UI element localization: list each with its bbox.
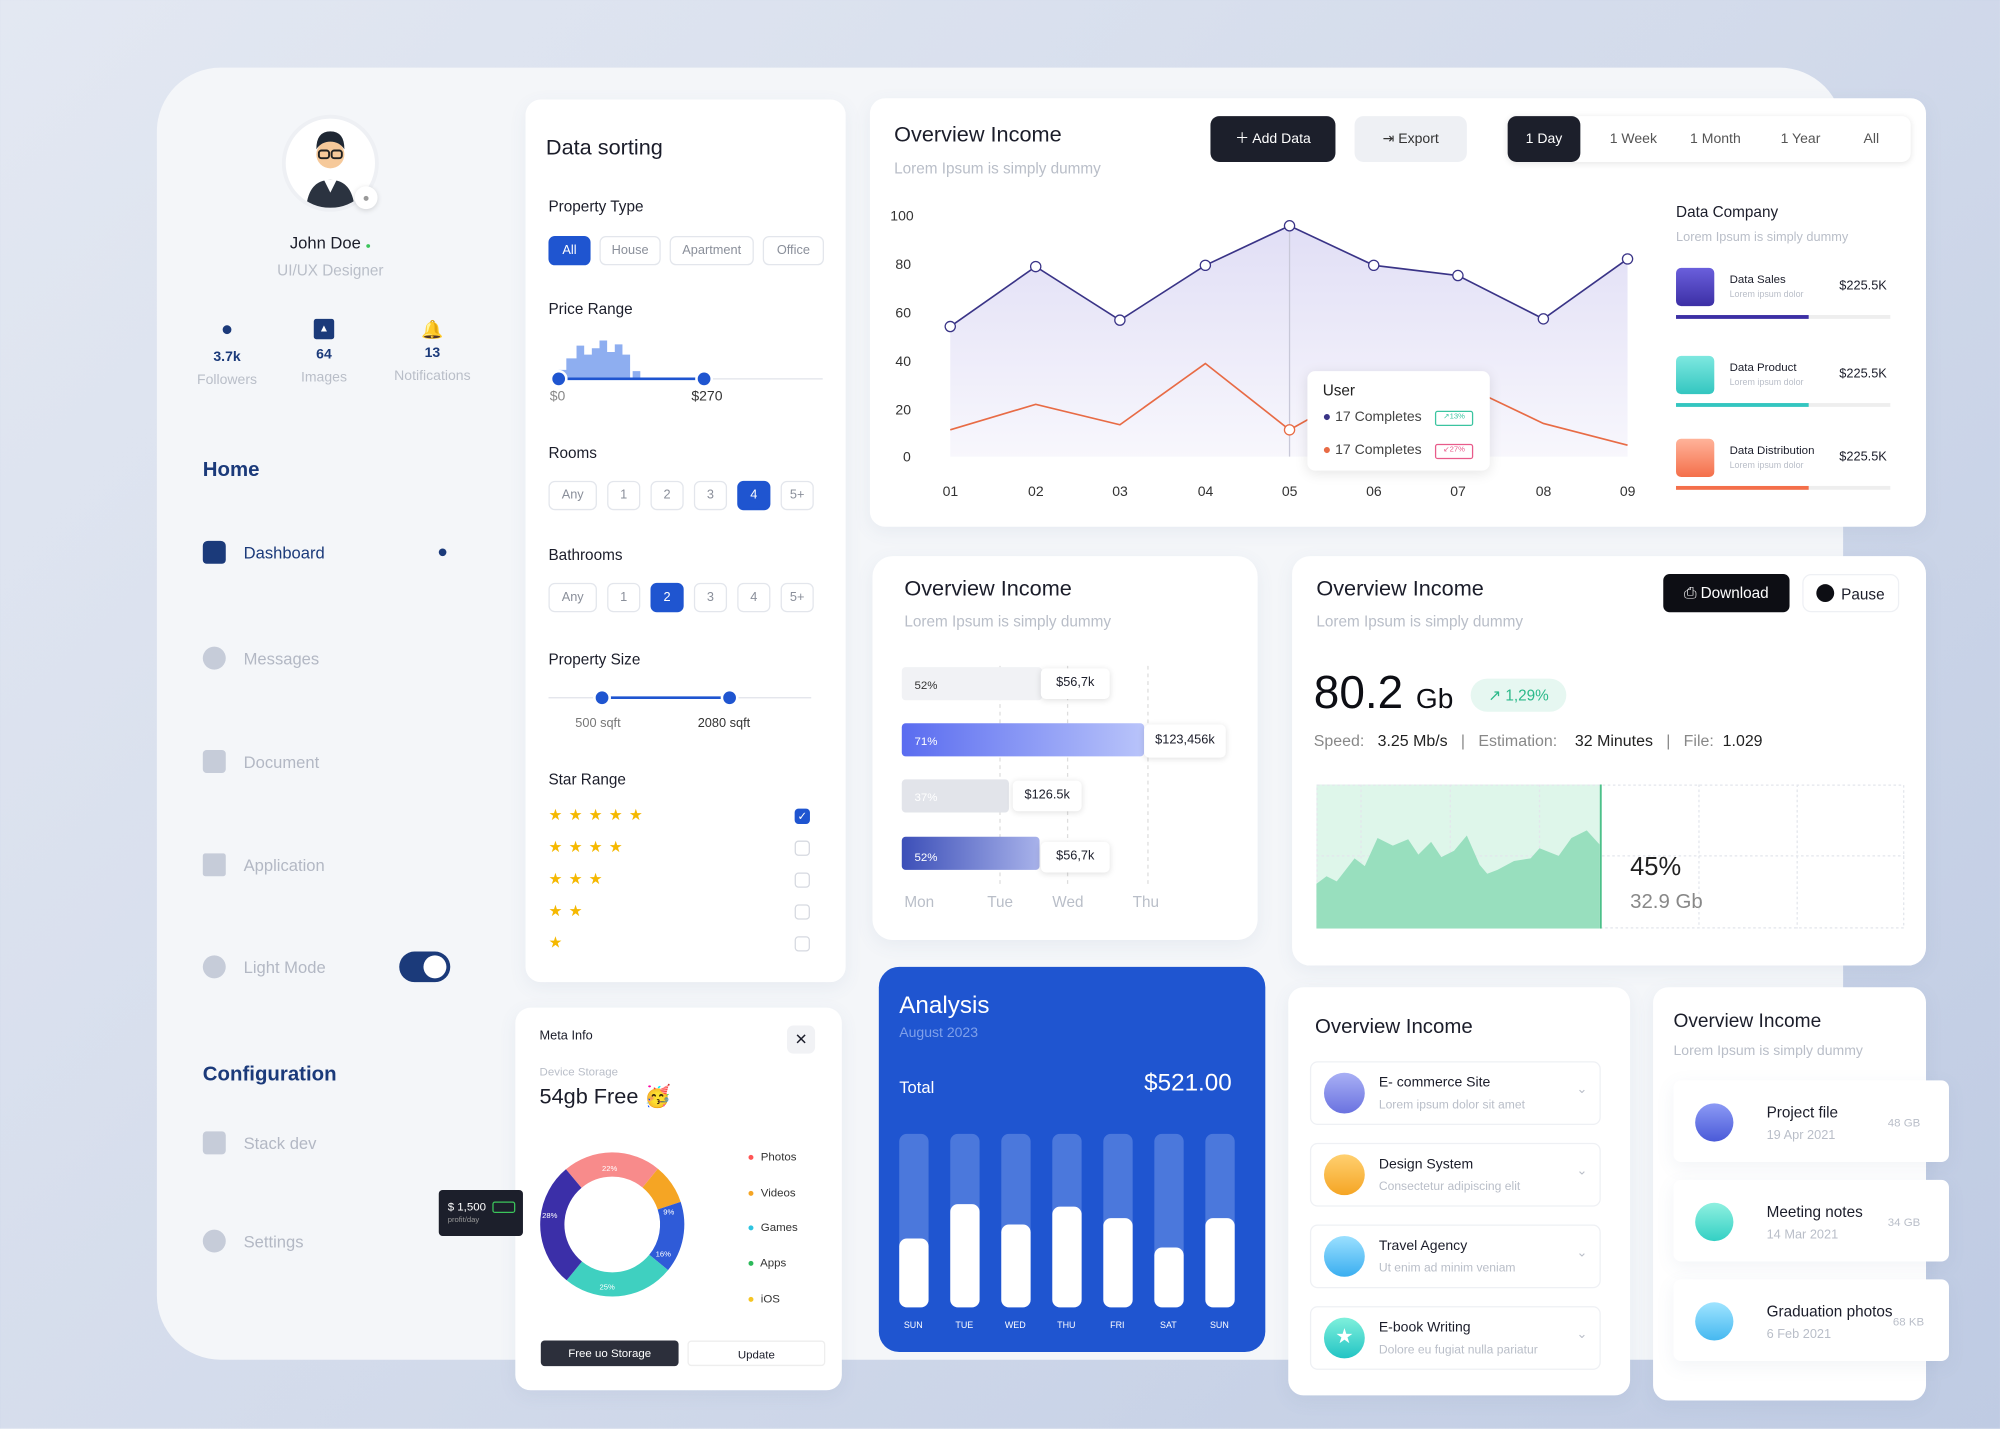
stats: Followers (197, 372, 257, 388)
panel: meta info (515, 1008, 842, 1390)
panel: overview income bars: 37% (915, 792, 938, 804)
callout: profit: $ 1,500 (448, 1200, 486, 1213)
panel: overview list: Dolore eu fugiat nulla pariatur (1379, 1343, 1538, 1357)
panel: overview income line chart (870, 98, 1926, 527)
tooltip: ● 17 Completes (1323, 409, 1422, 425)
panel: overview income bars: $126.5k (1024, 788, 1070, 802)
panel: data sorting: Any (562, 591, 584, 605)
donut: 9% (663, 1207, 675, 1216)
main panel (157, 68, 1843, 1360)
panel: data sorting: ★ (548, 934, 569, 952)
tooltip: ● 17 Completes (1323, 443, 1422, 458)
sidebar (197, 119, 471, 1252)
panel: overview list: Lorem ipsum dolor sit amet (1379, 1098, 1525, 1112)
stats: 13 (425, 346, 440, 361)
line chart: 05 (1282, 483, 1298, 499)
panel: data sorting: ✓ (797, 810, 807, 823)
panel: overview list: Travel Agency (1379, 1239, 1467, 1254)
panel: overview list: ★ (1335, 1327, 1354, 1348)
panel: files: Overview Income (1673, 1010, 1821, 1032)
panel: analysis: SUN (1210, 1320, 1229, 1330)
sidebar: Document (244, 752, 319, 771)
panel: overview list: ⌄ (1577, 1246, 1587, 1260)
sidebar: Settings (244, 1232, 304, 1251)
stats (197, 318, 471, 388)
panel: data sorting: House (612, 244, 649, 258)
panel: overview income line chart: Lorem Ipsum is simply dummy (1676, 231, 1848, 245)
panel: analysis: THU (1057, 1320, 1075, 1330)
panel: data sorting: 2 (664, 489, 671, 503)
panel: analysis: WED (1005, 1320, 1026, 1330)
panel: overview income bars: 52% (915, 680, 938, 692)
stats: Notifications (394, 369, 471, 384)
sidebar: ● (363, 191, 370, 204)
panel: analysis: SUN (904, 1320, 923, 1330)
panel: analysis: Analysis (899, 992, 989, 1019)
panel: data sorting: 2 (664, 591, 671, 605)
panel: analysis: TUE (955, 1320, 973, 1330)
panel: analysis: FRI (1110, 1320, 1125, 1330)
panel: overview income bars: $56,7k (1056, 676, 1094, 690)
panel: overview list: Ut enim ad minim veniam (1379, 1261, 1516, 1276)
panel: download: 32.9 Gb (1630, 892, 1703, 913)
legend (747, 1151, 798, 1305)
line chart: 80 (895, 256, 911, 272)
panel: data sorting: 1 (620, 591, 627, 605)
callout: profit: profit/day (448, 1217, 479, 1224)
line chart: 100 (890, 208, 914, 224)
panel: overview list: Design System (1379, 1157, 1473, 1172)
sidebar: Stack dev (244, 1133, 316, 1152)
panel: overview list: ⌄ (1577, 1328, 1587, 1342)
stats: 3.7k (213, 349, 241, 365)
panel: meta info: Update (738, 1348, 775, 1361)
panel: overview income bars: Tue (987, 893, 1013, 911)
donut: 22% (602, 1164, 618, 1173)
legend: ● iOS (747, 1292, 780, 1305)
tooltip: ↗13% (1443, 413, 1465, 421)
toggle (399, 952, 450, 982)
panel: data sorting: 5+ (790, 591, 804, 605)
panel: download: Pause (1841, 585, 1885, 603)
panel: overview income line chart: Lorem ipsum dolor (1730, 379, 1804, 388)
line chart: 04 (1198, 483, 1213, 499)
tooltip: User (1323, 381, 1355, 399)
panel: data sorting: ★★★ (548, 870, 609, 888)
file: graduation photos (1673, 1279, 1949, 1361)
panel: overview income line chart: Lorem Ipsum is simply dummy (894, 159, 1101, 177)
panel: data sorting: 4 (750, 489, 757, 503)
panel: overview income line chart: Overview Income (894, 122, 1062, 147)
file: project file: Project file (1767, 1103, 1838, 1121)
panel: data sorting: Apartment (682, 244, 741, 258)
panel: data sorting: 3 (707, 489, 714, 503)
line chart: 03 (1112, 483, 1128, 499)
name: John Doe ● (290, 233, 371, 253)
legend: ● Videos (747, 1186, 796, 1199)
legend: ● Apps (747, 1257, 786, 1269)
panel: overview income line chart: 1 Day (1526, 131, 1562, 147)
panel: data sorting: 2080 sqft (698, 717, 750, 731)
line chart: 07 (1450, 483, 1466, 499)
panel: meta info: Meta Info (540, 1029, 593, 1043)
panel: data sorting: Price Range (548, 300, 633, 318)
file: meeting notes: Meeting notes (1767, 1203, 1863, 1221)
panel: download: Speed: 3.25 Mb/s | Estimation: 32 Minutes | File: 1.029 (1314, 732, 1763, 750)
panel: meta info: Free uo Storage (568, 1347, 651, 1360)
panel: overview income bars: 71% (915, 736, 938, 748)
line chart: 08 (1536, 483, 1552, 499)
line chart: 0 (903, 449, 911, 465)
donut (540, 1152, 684, 1296)
legend: ● Photos (747, 1151, 797, 1163)
panel: overview income line chart: Data Distribution (1730, 444, 1814, 457)
panel: overview list (1288, 987, 1630, 1395)
panel: data sorting: Star Range (548, 770, 626, 788)
panel: download (1292, 556, 1926, 966)
file: graduation photos: Graduation photos (1767, 1302, 1893, 1320)
panel: overview list: ⌄ (1577, 1165, 1587, 1179)
panel: download: Overview Income (1316, 577, 1484, 601)
panel: download: ⎙ Download (1684, 584, 1769, 602)
panel: overview list: E-book Writing (1379, 1320, 1471, 1335)
panel: overview income line chart: Lorem ipsum dolor (1730, 462, 1804, 471)
line chart: 20 (895, 402, 911, 418)
sidebar: Dashboard (244, 543, 325, 562)
panel: files: Lorem Ipsum is simply dummy (1673, 1043, 1863, 1059)
panel: overview income bars (872, 556, 1258, 940)
panel: overview income line chart: $225.5K (1839, 450, 1887, 464)
file: project file: 48 GB (1888, 1116, 1920, 1129)
sidebar: Application (244, 855, 325, 874)
panel: overview list: E- commerce Site (1379, 1075, 1490, 1091)
panel: overview list: ⌄ (1577, 1083, 1587, 1097)
panel: download: 45% (1630, 853, 1681, 881)
panel: meta info: ✕ (795, 1031, 807, 1048)
panel: overview income bars: $123,456k (1155, 733, 1215, 747)
panel: data sorting: Bathrooms (548, 546, 622, 564)
line chart: 02 (1028, 483, 1044, 499)
panel: data sorting: ★★ (548, 902, 589, 920)
panel: overview list: Overview Income (1315, 1017, 1473, 1038)
panel: meta info: Device Storage (540, 1065, 618, 1078)
histogram (552, 340, 823, 386)
line chart (890, 208, 1636, 499)
file: graduation photos: 6 Feb 2021 (1767, 1328, 1831, 1342)
panel: data sorting: ★★★★★ (548, 806, 649, 824)
panel: data sorting: 4 (750, 591, 757, 605)
sidebar: Messages (244, 649, 319, 668)
tooltip: ↙27% (1443, 446, 1465, 454)
donut: 25% (599, 1283, 615, 1292)
sidebar: Configuration (203, 1064, 337, 1085)
panel: data sorting: 500 sqft (575, 717, 621, 731)
panel: overview income bars: Lorem Ipsum is simply dummy (904, 612, 1111, 630)
panel: overview income line chart: 1 Week (1610, 131, 1657, 147)
panel: data sorting: Any (562, 489, 584, 503)
donut: 16% (656, 1249, 671, 1258)
panel: analysis: Total (899, 1078, 934, 1097)
panel: analysis (879, 967, 1265, 1352)
file: project file: 19 Apr 2021 (1767, 1129, 1835, 1143)
panel: data sorting: 1 (620, 489, 627, 503)
panel: data sorting (526, 99, 846, 982)
panel: overview income bars: $56,7k (1056, 849, 1094, 864)
nav home: Home (203, 459, 260, 481)
stats: 64 (316, 347, 332, 362)
line chart: 09 (1620, 483, 1636, 499)
tooltip (1307, 371, 1490, 471)
panel: data sorting: All (562, 244, 577, 258)
panel: overview income line chart: $225.5K (1839, 367, 1887, 381)
panel: data sorting: 5+ (790, 489, 804, 503)
panel: data sorting: ★★★★ (548, 838, 629, 856)
file: project file (1673, 1080, 1949, 1162)
sidebar: Light Mode (244, 957, 326, 976)
panel: files (1653, 987, 1926, 1401)
panel: data sorting: $0 (550, 389, 565, 404)
stats: ▲ (319, 323, 329, 334)
panel: overview income bars: 52% (915, 852, 938, 864)
panel: overview income bars: Wed (1052, 893, 1084, 911)
panel: overview income line chart: 1 Month (1690, 131, 1741, 147)
panel: overview list: Consectetur adipiscing elit (1379, 1180, 1520, 1194)
panel: data sorting: Office (777, 244, 810, 258)
panel: overview income bars: Thu (1133, 893, 1159, 911)
panel: overview income line chart: ＋ Add Data (1235, 131, 1311, 147)
stats: Images (301, 370, 347, 385)
panel: analysis: August 2023 (899, 1026, 978, 1041)
panel: data sorting: $270 (691, 389, 723, 404)
panel: overview income line chart: $225.5K (1839, 279, 1887, 293)
line chart: 60 (895, 305, 911, 321)
data company: Data Company (1676, 203, 1778, 221)
legend: ● Games (747, 1221, 798, 1234)
donut: 28% (542, 1211, 558, 1220)
panel: download: Lorem Ipsum is simply dummy (1316, 612, 1523, 630)
stats: 🔔 (421, 319, 444, 339)
panel: analysis: $521.00 (1144, 1070, 1232, 1097)
panel: overview income line chart: 1 Year (1781, 131, 1820, 147)
line chart: 40 (895, 353, 911, 369)
avatar (282, 115, 379, 212)
panel: overview income line chart: ⇥ Export (1383, 131, 1439, 147)
panel: data sorting: 3 (707, 591, 714, 605)
file: meeting notes: 14 Mar 2021 (1767, 1228, 1838, 1242)
line chart: 01 (943, 483, 958, 499)
panel: overview income line chart: Data Sales (1730, 273, 1786, 286)
panel: analysis: SAT (1160, 1320, 1177, 1330)
panel: meta info: 54gb Free 🥳 (540, 1084, 671, 1108)
panel: data sorting: Property Type (548, 198, 643, 216)
panel: data sorting: Rooms (548, 444, 597, 462)
panel: overview income line chart: All (1864, 131, 1879, 147)
file: meeting notes: 34 GB (1888, 1216, 1920, 1228)
panel: overview income line chart: Lorem ipsum dolor (1730, 291, 1804, 300)
panel: data sorting: Property Size (548, 651, 640, 668)
panel: overview income bars: Overview Income (904, 577, 1072, 601)
sidebar: UI/UX Designer (277, 261, 384, 279)
file: meeting notes (1673, 1180, 1949, 1261)
panel: download: 80.2 Gb (1314, 666, 1453, 718)
panel: overview income line chart: Data Product (1730, 361, 1797, 374)
callout: profit (439, 1190, 523, 1236)
panel: download: ↗ 1,29% (1488, 686, 1549, 704)
panel: overview income bars: Mon (904, 893, 934, 911)
stats: ● (221, 319, 233, 341)
panel: data sorting: Data sorting (546, 135, 663, 159)
file: graduation photos: 68 KB (1893, 1315, 1924, 1328)
line chart: 06 (1366, 483, 1382, 499)
